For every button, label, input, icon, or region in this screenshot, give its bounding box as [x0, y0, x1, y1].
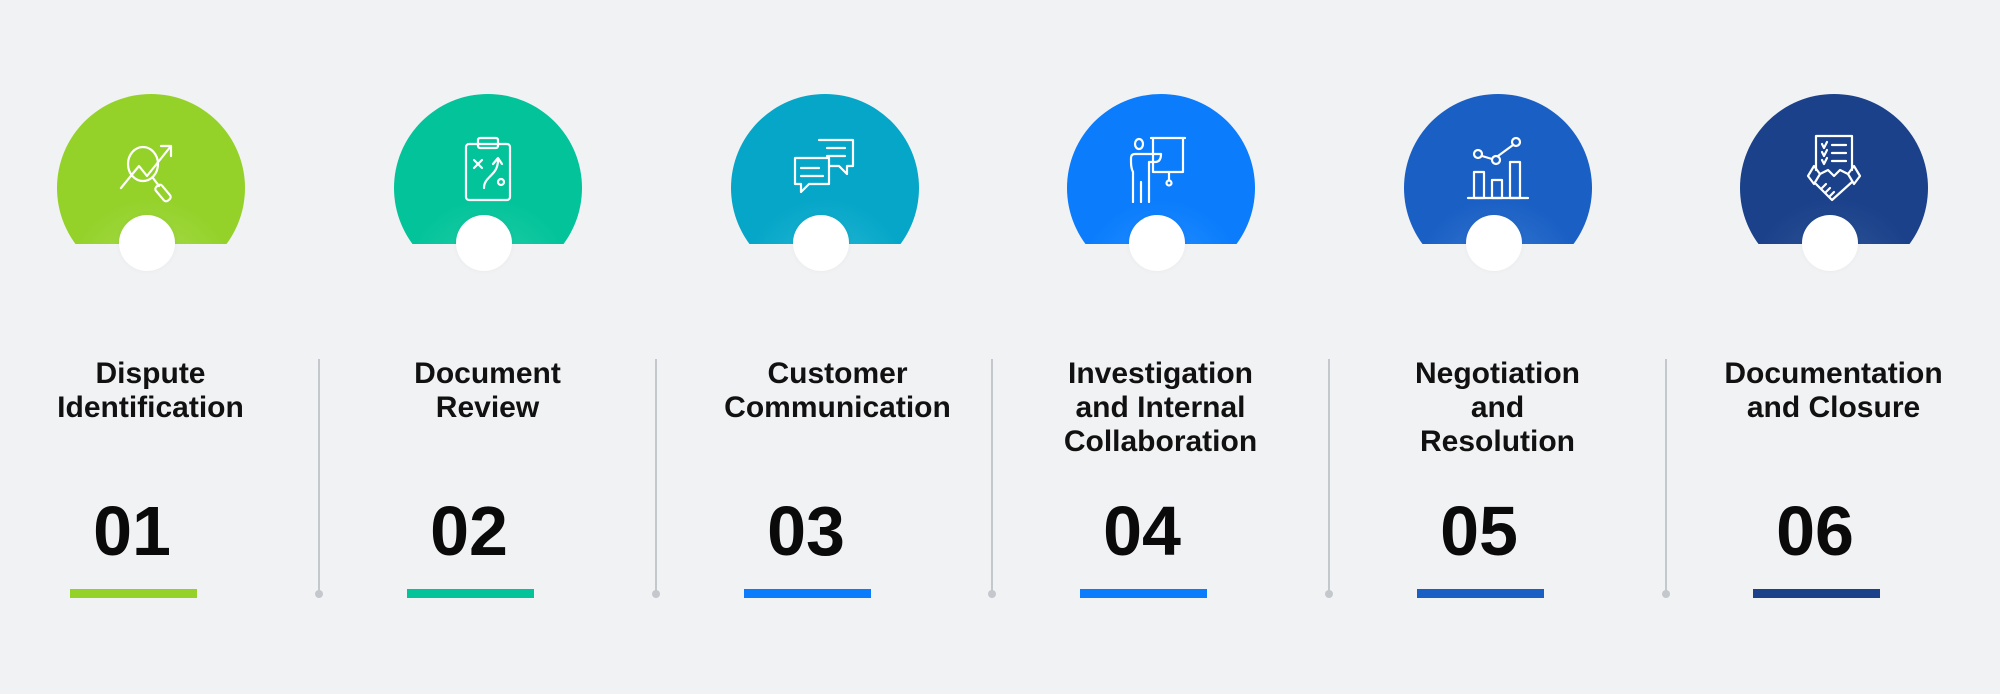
semicircle 4 — [1067, 94, 1255, 244]
title 2: Document — [414, 357, 561, 390]
white dot 3 — [793, 215, 849, 271]
number 03: 03 — [767, 492, 845, 570]
divider 5 — [1665, 359, 1667, 593]
icon: chat bubbles — [794, 138, 854, 194]
panel: step 1 — [57, 94, 245, 598]
title 3 — [724, 357, 951, 424]
icon: bar chart — [1466, 136, 1530, 200]
title 4: and Internal — [1075, 391, 1246, 424]
icon: magnifier chart — [120, 144, 172, 202]
white dot 1 — [119, 215, 175, 271]
semicircle 5 — [1404, 94, 1592, 244]
panel: step 4 — [1064, 94, 1257, 598]
title 4: Investigation — [1068, 357, 1253, 390]
title 6 — [1724, 357, 1943, 424]
number 05: 05 — [1440, 492, 1518, 570]
white dot 5 — [1466, 215, 1522, 271]
title 1: Dispute — [95, 357, 206, 390]
bar 3 — [744, 589, 871, 598]
bar 4 — [1080, 589, 1207, 598]
panel: step 3 — [724, 94, 951, 598]
icon: clipboard — [464, 136, 512, 202]
panel: step 5 — [1404, 94, 1592, 598]
number 01: 01 — [93, 492, 171, 570]
title 5: and — [1471, 391, 1524, 424]
divider 3 — [991, 359, 993, 593]
title 3: Customer — [767, 357, 908, 390]
bar 2 — [407, 589, 534, 598]
number 04: 04 — [1103, 492, 1181, 570]
number 02: 02 — [430, 492, 508, 570]
bar 5 — [1417, 589, 1544, 598]
title 2: Review — [436, 391, 539, 424]
title 1 — [57, 357, 244, 424]
title 1: Identification — [57, 391, 244, 424]
divider 1 — [318, 359, 320, 593]
semicircle 6 — [1740, 94, 1928, 244]
white dot 2 — [456, 215, 512, 271]
panel: step 2 — [394, 94, 582, 598]
title 4: Collaboration — [1064, 425, 1257, 458]
title 2 — [414, 357, 561, 424]
title 4 — [1064, 357, 1257, 458]
divider 4 — [1328, 359, 1330, 593]
semicircle 1 — [57, 94, 245, 244]
number 06: 06 — [1776, 492, 1854, 570]
white dot 4 — [1129, 215, 1185, 271]
semicircle 2 — [394, 94, 582, 244]
title 5 — [1415, 357, 1580, 458]
title 3: Communication — [724, 391, 951, 424]
semicircle 3 — [731, 94, 919, 244]
bar 6 — [1753, 589, 1880, 598]
white dot 6 — [1802, 215, 1858, 271]
icon: contract handshake — [1806, 134, 1862, 202]
divider 2 — [655, 359, 657, 593]
panel: step 6 — [1724, 94, 1943, 598]
title 5: Resolution — [1420, 425, 1575, 458]
title 5: Negotiation — [1415, 357, 1580, 390]
bar 1 — [70, 589, 197, 598]
title 6: and Closure — [1747, 391, 1920, 424]
icon: presenter — [1130, 136, 1186, 204]
title 6: Documentation — [1724, 357, 1943, 390]
